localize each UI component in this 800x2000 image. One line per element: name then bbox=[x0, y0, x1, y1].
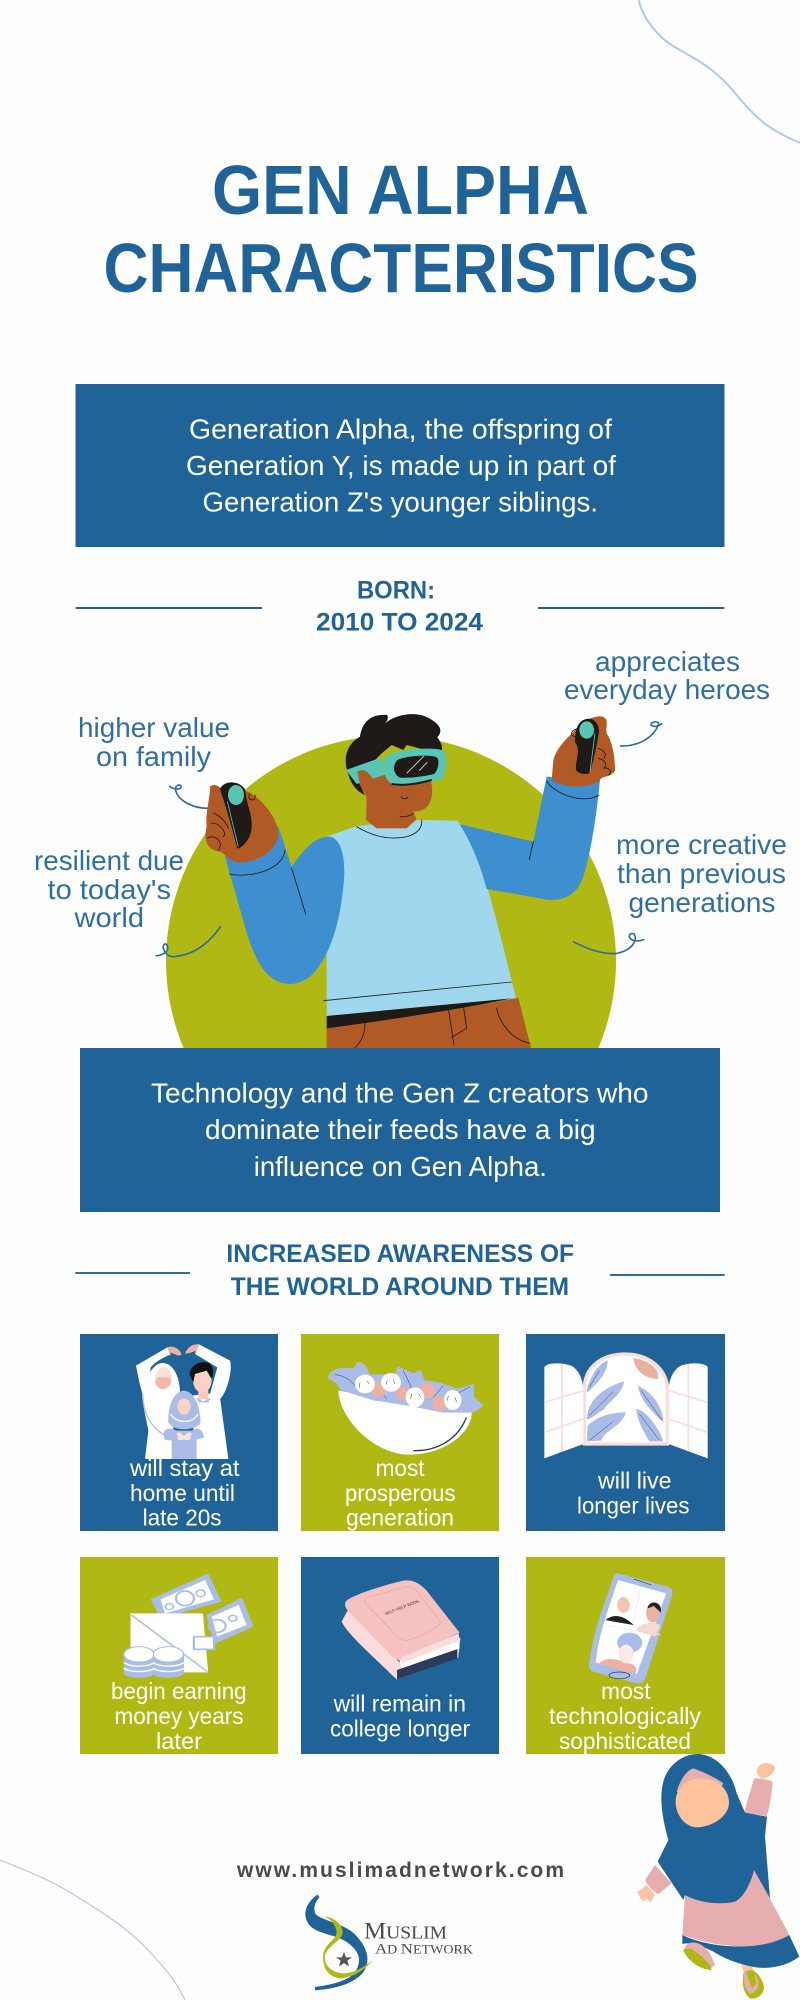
card: technology bbox=[526, 1557, 725, 1754]
panel: technology bbox=[80, 1048, 720, 1212]
card label: begin earning bbox=[111, 1678, 247, 1704]
green circle backdrop bbox=[166, 736, 616, 1049]
logo wordmark: MUSLIM bbox=[364, 1918, 447, 1943]
card label: most bbox=[601, 1678, 651, 1704]
logo mark bbox=[307, 1896, 373, 1989]
callout: more creative: generations bbox=[628, 887, 776, 918]
heading: born: 2010 TO 2024 bbox=[316, 608, 483, 636]
icon: open window bbox=[544, 1354, 708, 1458]
heading: born: BORN: bbox=[357, 576, 435, 604]
card label: most bbox=[376, 1455, 425, 1481]
card label bbox=[330, 1691, 470, 1742]
card label bbox=[549, 1678, 701, 1754]
callout: appreciates everyday heroes: everyday heroes bbox=[564, 674, 770, 705]
card label: technologically bbox=[549, 1703, 701, 1729]
panel: technology: influence on Gen Alpha. bbox=[254, 1151, 547, 1182]
card label: late 20s bbox=[143, 1505, 222, 1531]
callout: resilient: to today's bbox=[48, 874, 171, 905]
heading: born bbox=[76, 576, 724, 636]
intro text: Generation Z's younger siblings. bbox=[202, 486, 598, 518]
card label: generation bbox=[346, 1505, 454, 1531]
icon: money and coins bbox=[124, 1573, 253, 1678]
title: GEN ALPHA bbox=[212, 151, 589, 229]
trousers bbox=[327, 998, 532, 1051]
heading: increased awareness bbox=[75, 1240, 725, 1301]
right arm bbox=[459, 777, 600, 900]
card label: sophisticated bbox=[559, 1728, 691, 1754]
panel: technology: dominate their feeds have a big bbox=[205, 1114, 596, 1145]
squiggle arrows bbox=[156, 722, 662, 957]
neck and face bbox=[358, 775, 432, 828]
waistband bbox=[327, 998, 512, 1029]
title: CHARACTERISTICS bbox=[104, 229, 698, 307]
callout: higher value on family: on family bbox=[96, 741, 211, 772]
intro text bbox=[186, 414, 616, 518]
heading: increased awareness: THE WORLD AROUND THEM bbox=[231, 1273, 569, 1301]
callout: appreciates everyday heroes: appreciates bbox=[595, 646, 740, 677]
card label: home until bbox=[130, 1480, 235, 1506]
card: earning bbox=[80, 1557, 278, 1754]
card: most prosperous bbox=[301, 1334, 499, 1531]
callout: higher value on family: higher value bbox=[78, 712, 230, 743]
callout: resilient: world bbox=[73, 902, 144, 933]
title bbox=[104, 151, 698, 307]
heading: increased awareness: INCREASED AWARENESS OF bbox=[226, 1240, 574, 1268]
card label: later bbox=[156, 1728, 202, 1754]
intro text: Generation Alpha, the offspring of bbox=[189, 414, 612, 444]
card label: longer lives bbox=[577, 1493, 690, 1519]
callout: more creative: than previous bbox=[617, 858, 786, 889]
icon: books bbox=[343, 1580, 460, 1679]
card label bbox=[129, 1455, 240, 1531]
logo wordmark bbox=[364, 1918, 473, 1957]
card label: college longer bbox=[330, 1716, 470, 1742]
card label: will remain in bbox=[333, 1691, 466, 1717]
illustration: boy with VR headset bbox=[205, 714, 615, 1051]
card: longer lives bbox=[526, 1334, 725, 1531]
left arm bbox=[225, 827, 344, 984]
callout: resilient: resilient due bbox=[34, 845, 184, 876]
panel: technology: Technology and the Gen Z creators who bbox=[151, 1078, 648, 1109]
hair bbox=[346, 714, 442, 795]
right hand with controller bbox=[552, 716, 615, 787]
callout: more creative bbox=[616, 829, 787, 918]
VR headset strap and visor bbox=[346, 757, 384, 784]
card: college bbox=[301, 1557, 499, 1754]
website url: www.muslimadnetwork.com bbox=[236, 1859, 564, 1882]
icon: bowl of vegetables bbox=[329, 1363, 482, 1455]
panel: intro bbox=[76, 384, 724, 547]
callout: higher value on family bbox=[78, 712, 230, 772]
card label bbox=[111, 1678, 247, 1754]
intro text: Generation Y, is made up in part of bbox=[186, 450, 616, 481]
callout: more creative: more creative bbox=[616, 829, 787, 860]
icon: books: SELF-HELP BOOK bbox=[384, 1599, 421, 1617]
logo: Muslim Ad Network bbox=[307, 1896, 473, 1989]
illustration: girl waving bbox=[637, 1754, 799, 1998]
logo wordmark: AD NETWORK bbox=[375, 1941, 473, 1957]
callout: appreciates everyday heroes bbox=[564, 646, 770, 705]
icon: smartphone video call bbox=[589, 1573, 672, 1683]
card label: will stay at bbox=[129, 1455, 240, 1481]
card label: money years bbox=[114, 1703, 244, 1729]
sweater body bbox=[327, 820, 516, 1016]
callout: resilient bbox=[34, 845, 184, 933]
card label bbox=[577, 1468, 690, 1519]
card label: prosperous bbox=[345, 1480, 456, 1506]
card label: will live bbox=[597, 1468, 672, 1494]
left hand with controller bbox=[205, 785, 278, 862]
icon: family bbox=[136, 1344, 231, 1459]
card: stay at home bbox=[80, 1334, 278, 1531]
callouts bbox=[34, 646, 787, 957]
card label bbox=[345, 1455, 456, 1531]
